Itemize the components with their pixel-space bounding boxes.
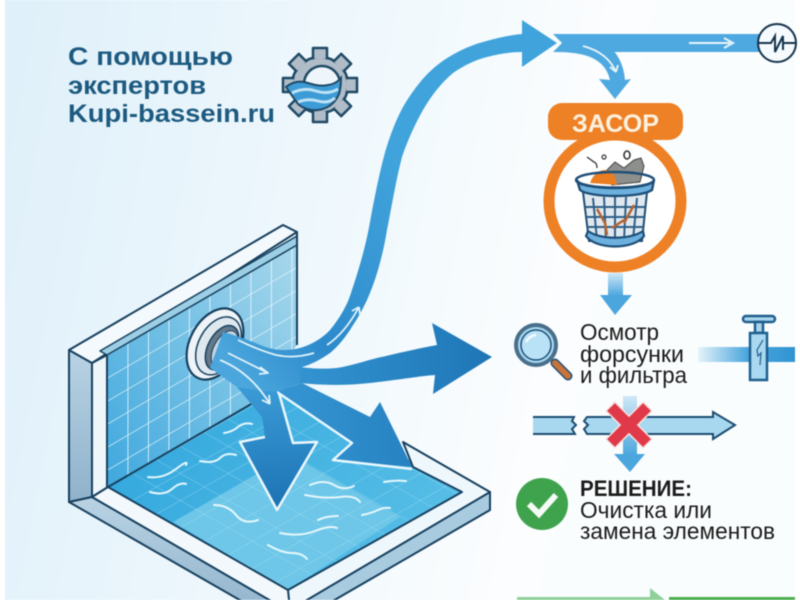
pool illustration [69,20,557,600]
white direction arrow [689,38,733,48]
flow arrow: right [300,323,492,394]
icon: gear with waves [283,48,357,122]
vertical flow behind broken pipe [614,396,645,472]
inspection text [580,319,687,388]
label text: ЗАСОР [572,110,659,138]
branch arrow down to blockage [555,50,631,99]
flow arrow: down [237,387,317,510]
title: С помощью [68,43,233,71]
flow arrow: up to pipe [210,20,557,392]
inspection text: и фильтра [580,362,687,388]
solution text [580,476,775,544]
orange ring [549,135,681,267]
icon: red cross [610,406,648,444]
pool rim and outer walls [69,225,490,600]
solution text: РЕШЕНИЕ: [580,476,692,501]
title: экспертов [68,72,206,100]
blockage badge [548,103,683,267]
tiled back wall [100,232,297,487]
orange label pill [548,103,683,140]
title [68,43,275,128]
pool floor water [108,382,462,590]
icon: green check [516,478,568,530]
white curved highlight [583,46,618,72]
arrow down to inspection [600,273,632,315]
inspection text: Осмотр [580,319,659,345]
inspection text: форсунки [580,341,684,367]
solution text: Очистка или [580,497,712,523]
broken pipe [533,412,735,439]
bottom green arrow [517,588,795,600]
title: Kupi-bassein.ru [68,100,275,128]
pipe to the right [553,34,760,52]
icon: magnifier [516,325,568,376]
icon: clogged filter basket [576,151,654,246]
icon: pipe symbol [758,24,796,62]
solution text: замена элементов [580,518,775,544]
pipe with cracked valve [698,316,795,380]
flow highlights [220,307,360,404]
water ripples [148,423,406,559]
nozzle fitting [175,299,255,389]
flow arrow: lower right [277,383,412,469]
icon: valve [743,316,775,380]
